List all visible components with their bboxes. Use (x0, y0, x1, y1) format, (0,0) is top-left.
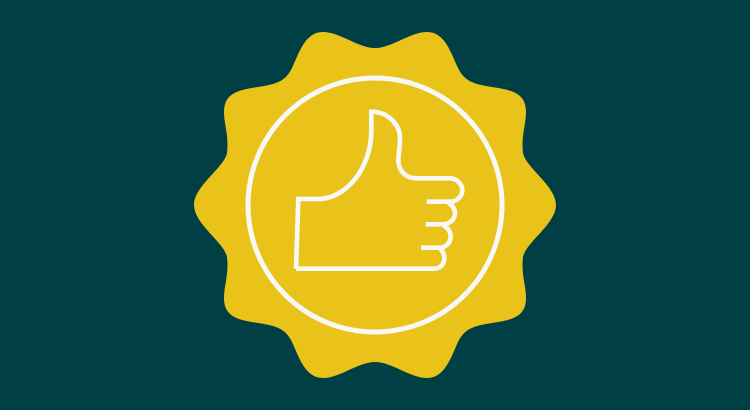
wavy yellow badge (194, 32, 556, 378)
white circle ring (248, 78, 502, 332)
icon: thumbs up (296, 112, 462, 269)
